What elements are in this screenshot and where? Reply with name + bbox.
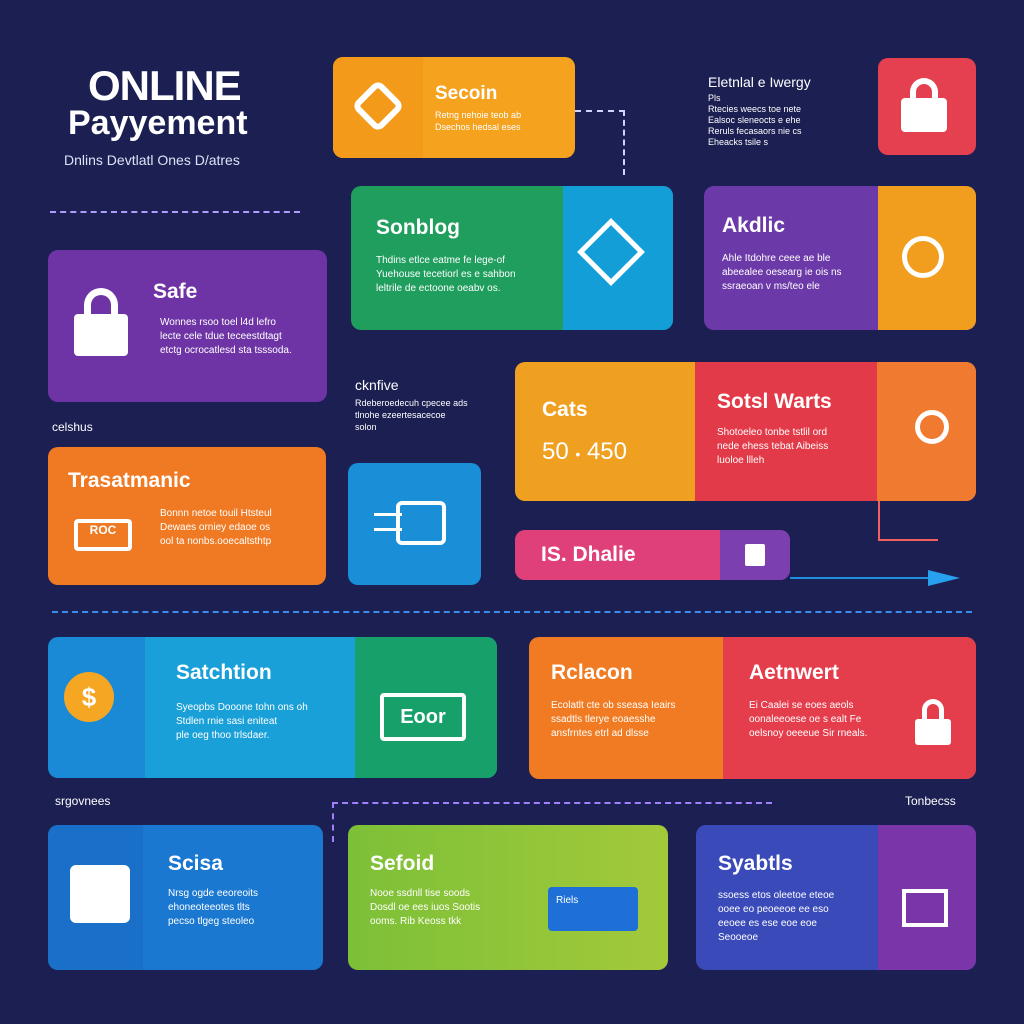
card: Syabtls: Seooeoe <box>718 932 758 943</box>
card: Sonblog: Sonblog <box>376 216 460 239</box>
dashed line arrow left <box>50 211 300 215</box>
top right text: Eheacks tsile s <box>708 137 768 147</box>
card: Cats / Sotsl Warts: 50 • 450 <box>542 438 627 465</box>
connector <box>878 501 938 541</box>
card: Trasatmanic: Dewaes orniey edaoe os <box>160 522 270 533</box>
title <box>64 62 248 168</box>
card: Akdlic: Ahle Itdohre ceee ae ble <box>722 253 830 264</box>
icon: gear <box>351 79 405 133</box>
card: Syabtls: Syabtls <box>718 852 793 875</box>
top right text: Eletnlal e Iwergy <box>708 74 811 90</box>
top right text: Ealsoc sleneocts e ehe <box>708 115 801 125</box>
card: Trasatmanic: ROC <box>90 523 116 537</box>
card: Akdlic <box>704 186 976 330</box>
bar: IS Dhalie: IS. Dhalie <box>541 543 636 566</box>
card: Rclacon / Aetnwert: Ecolatlt cte ob sseasa Ieairs <box>551 700 676 711</box>
card: Scisa <box>48 825 323 970</box>
text: cknfive: solon <box>355 422 377 432</box>
card: Satchtion <box>48 637 497 778</box>
text: cknfive <box>355 377 468 432</box>
card: Scisa: pecso tlgeg steoleo <box>168 916 254 927</box>
card: Sefoid: Nooe ssdnll tise soods <box>370 888 470 899</box>
card: Sonblog: Thdins etlce eatme fe lege-of <box>376 255 505 266</box>
card: Sefoid: Dosdl oe ees iuos Sootis <box>370 902 480 913</box>
card: Sefoid: Riels <box>556 895 578 906</box>
card: Safe: lecte cele tdue teceestdtagt <box>160 331 282 342</box>
card: Rclacon / Aetnwert: Ei Caalei se eoes aeols <box>749 700 854 711</box>
card: Akdlic: Akdlic <box>722 214 785 237</box>
dashed divider <box>52 611 972 613</box>
card: Trasatmanic: ool ta nonbs.ooecaltsthtp <box>160 536 271 547</box>
text: cknfive: tlnohe ezeertesacecoe <box>355 410 446 420</box>
label celshus: celshus <box>52 420 93 434</box>
card: Cats / Sotsl Warts <box>515 362 976 501</box>
title: Payyement <box>68 104 248 142</box>
card: Secoin: Dsechos hedsal eses <box>435 122 521 132</box>
card: Secoin: Retng nehoie teob ab <box>435 110 521 120</box>
card: Rclacon / Aetnwert: oonaleeoese oe s ealt Fe <box>749 714 861 725</box>
card: Safe: Safe <box>153 280 197 303</box>
card: Safe <box>48 250 327 402</box>
top right text: Rtecies weecs toe nete <box>708 104 801 114</box>
card: Safe: Wonnes rsoo toel l4d lefro <box>160 317 276 328</box>
card: Rclacon / Aetnwert: oelsnoy oeeeue Sir rneals. <box>749 728 867 739</box>
card: Cats / Sotsl Warts: nede ehess tebat Aibeiss <box>717 441 828 452</box>
card: Syabtls <box>696 825 976 970</box>
card: Rclacon / Aetnwert <box>529 637 976 779</box>
card: Trasatmanic <box>48 447 326 585</box>
card: Rclacon / Aetnwert: ssadtls tlerye eoaesshe <box>551 714 656 725</box>
card: Trasatmanic: Trasatmanic <box>68 469 191 492</box>
connector dashes <box>575 110 625 175</box>
labels: srgovnees <box>55 794 110 808</box>
card: Satchtion: Syeopbs Dooone tohn ons oh <box>176 702 308 713</box>
card: Syabtls: ssoess etos oleetoe eteoe <box>718 890 834 901</box>
card: Sonblog <box>351 186 673 330</box>
card: Cats / Sotsl Warts: Shotoeleo tonbe tstlil ord <box>717 427 827 438</box>
card: Trasatmanic: Bonnn netoe touil Htsteul <box>160 508 272 519</box>
card: Satchtion: Eoor <box>400 706 446 728</box>
card: Sefoid: ooms. Rib Keoss tkk <box>370 916 461 927</box>
card: Syabtls: ooee eo peoeeoe ee eso <box>718 904 829 915</box>
title: Dnlins Devtlatl Ones D/atres <box>64 152 240 168</box>
card: Sonblog: Yuehouse tecetiorl es e sahbon <box>376 269 516 280</box>
card: Cats / Sotsl Warts: Cats <box>542 398 588 421</box>
card: Syabtls: eeoee es ese eoe eoe <box>718 918 817 929</box>
card: Scisa: ehoneoteeotes tlts <box>168 902 250 913</box>
card: Rclacon / Aetnwert: Aetnwert <box>749 661 839 684</box>
bar: IS Dhalie <box>515 530 790 580</box>
card: Secoin: Secoin <box>435 83 497 104</box>
top right text <box>708 74 811 147</box>
arrow right <box>790 570 960 586</box>
card: Satchtion: $ <box>82 682 96 712</box>
card: Satchtion: ple oeg thoo trlsdaer. <box>176 730 269 741</box>
top right text: Pls <box>708 93 721 103</box>
icon: blue square <box>348 463 481 585</box>
card: Rclacon / Aetnwert: Rclacon <box>551 661 633 684</box>
card: Akdlic: ssraeoan v ms/teo ele <box>722 281 820 292</box>
card: Safe: etctg ocrocatlesd sta tsssoda. <box>160 345 292 356</box>
card: Sonblog: leltrile de ectoone oeabv os. <box>376 283 501 294</box>
card: Secoin <box>333 57 575 158</box>
card: Cats / Sotsl Warts: Sotsl Warts <box>717 390 832 413</box>
card: Cats / Sotsl Warts: luoloe llleh <box>717 455 764 466</box>
text: cknfive: cknfive <box>355 377 399 393</box>
card: Sefoid: Sefoid <box>370 852 434 875</box>
label right: Tonbecss <box>905 794 956 808</box>
dashed connector <box>332 802 772 842</box>
card: Sefoid <box>348 825 668 970</box>
top right text: Reruls fecasaors nie cs <box>708 126 802 136</box>
icon: red lock bubble <box>878 58 976 155</box>
card: Scisa: Nrsg ogde eeoreoits <box>168 888 258 899</box>
card: Satchtion: Stdlen rnie sasi eniteat <box>176 716 277 727</box>
card: Akdlic: abeealee oesearg ie ois ns <box>722 267 842 278</box>
title: ONLINE <box>88 62 241 109</box>
card: Satchtion: Satchtion <box>176 661 272 684</box>
card: Rclacon / Aetnwert: ansfrntes etrl ad dlsse <box>551 728 649 739</box>
text: cknfive: Rdeberoedecuh cpecee ads <box>355 398 468 408</box>
card: Scisa: Scisa <box>168 852 223 875</box>
